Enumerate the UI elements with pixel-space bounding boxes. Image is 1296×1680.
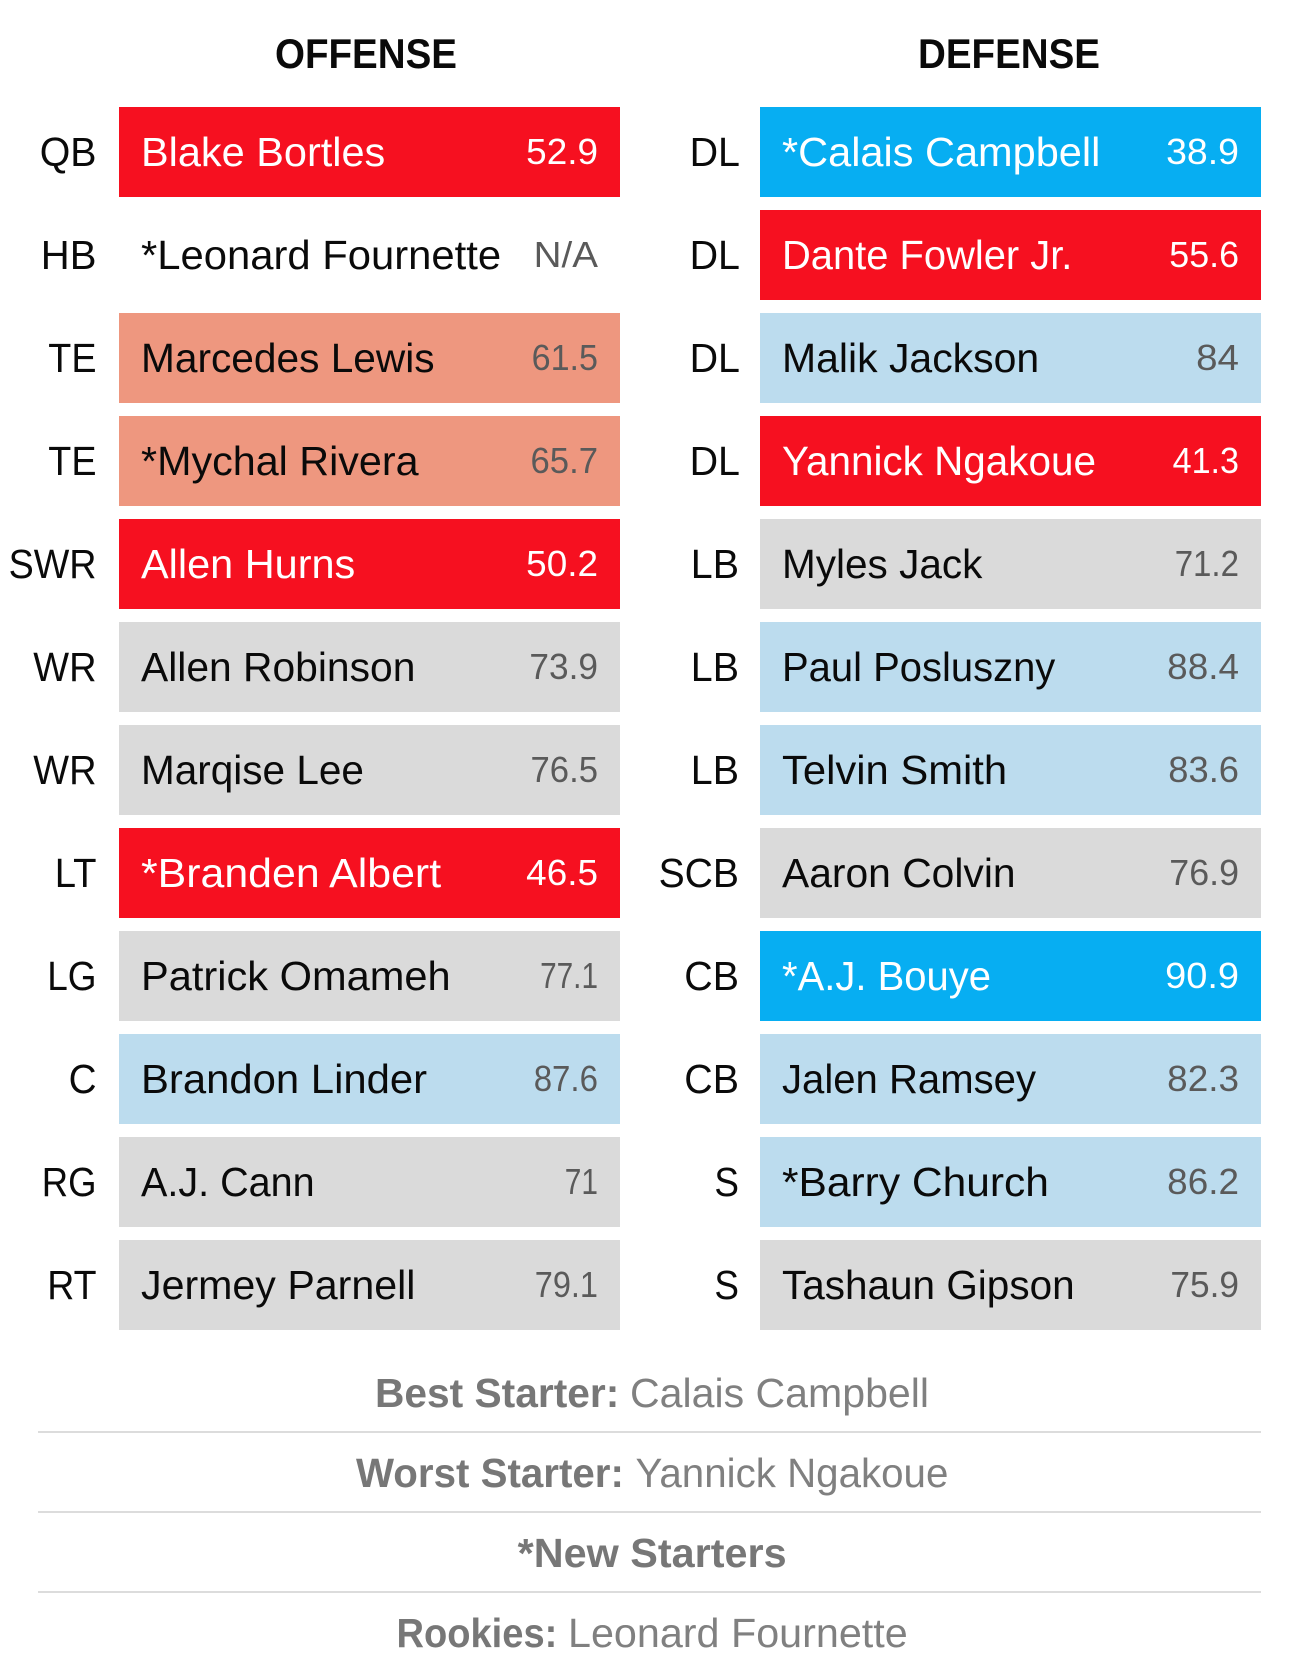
footer: rookies: Leonard Fournette xyxy=(568,1610,908,1656)
row: TE Mychal Rivera xyxy=(48,416,620,506)
row: LG Patrick Omameh: 77.1 xyxy=(540,955,598,996)
row: RG A.J. Cann: RG xyxy=(42,1159,96,1205)
row: DL Yannick Ngakoue: 41.3 xyxy=(1173,440,1239,481)
row: S Barry Church: S xyxy=(714,1159,739,1205)
row: WR Allen Robinson: 73.9 xyxy=(529,646,598,687)
row: S Tashaun Gipson xyxy=(714,1240,1261,1330)
footer: worst starter: Worst Starter: xyxy=(356,1450,624,1496)
footer: best starter xyxy=(375,1370,929,1416)
row: LB Myles Jack: LB xyxy=(691,541,739,587)
row: DL Yannick Ngakoue xyxy=(690,416,1261,506)
row: S Barry Church: 86.2 xyxy=(1167,1161,1239,1202)
row: WR Allen Robinson: Allen Robinson xyxy=(141,644,415,690)
row: CB Jalen Ramsey: CB xyxy=(684,1056,739,1102)
row: CB A.J. Bouye: 90.9 xyxy=(1165,955,1239,996)
row: QB Blake Bortles xyxy=(40,107,620,197)
footer: rookies xyxy=(396,1610,908,1656)
heading: offense: OFFENSE xyxy=(275,30,457,77)
footer: best starter: Best Starter: xyxy=(375,1370,619,1416)
row: SWR Allen Hurns xyxy=(9,519,620,609)
row: LT Branden Albert: 46.5 xyxy=(526,852,598,893)
row: CB Jalen Ramsey: Jalen Ramsey xyxy=(782,1056,1036,1102)
row: WR Allen Robinson: WR xyxy=(33,644,96,690)
row: DL Dante Fowler Jr.: 55.6 xyxy=(1169,234,1239,275)
row: LG Patrick Omameh: Patrick Omameh xyxy=(141,953,451,999)
row: DL Dante Fowler Jr.: DL xyxy=(690,232,740,278)
row: LT Branden Albert xyxy=(55,828,620,918)
row: TE Marcedes Lewis: 61.5 xyxy=(532,337,598,378)
row: LB Myles Jack: 71.2 xyxy=(1175,543,1239,584)
row: DL Dante Fowler Jr. xyxy=(690,210,1261,300)
row: CB Jalen Ramsey: 82.3 xyxy=(1167,1058,1239,1099)
row: LT Branden Albert: LT xyxy=(55,850,96,896)
row: C Brandon Linder: 87.6 xyxy=(534,1058,598,1099)
footer: best starter: Calais Campbell xyxy=(630,1370,929,1416)
panel: offense roster xyxy=(9,107,620,1330)
footer: new starters note: *New Starters xyxy=(518,1530,787,1576)
row: LB Telvin Smith: Telvin Smith xyxy=(782,747,1007,793)
row: TE Marcedes Lewis: TE xyxy=(48,335,96,381)
row: CB Jalen Ramsey xyxy=(684,1034,1261,1124)
row: HB Leonard Fournette: N/A xyxy=(534,234,598,275)
row: LB Myles Jack xyxy=(691,519,1261,609)
row: LB Paul Posluszny: Paul Posluszny xyxy=(782,644,1056,690)
row: C Brandon Linder xyxy=(69,1034,620,1124)
row: SWR Allen Hurns: Allen Hurns xyxy=(141,541,355,587)
row: RT Jermey Parnell xyxy=(47,1240,620,1330)
row: HB Leonard Fournette xyxy=(41,232,598,278)
row: DL Calais Campbell: 38.9 xyxy=(1166,131,1239,172)
row: DL Malik Jackson: Malik Jackson xyxy=(782,335,1039,381)
row: DL Malik Jackson xyxy=(690,313,1261,403)
row: DL Dante Fowler Jr.: Dante Fowler Jr. xyxy=(782,232,1072,278)
row: S Barry Church xyxy=(714,1137,1261,1227)
row: SCB Aaron Colvin xyxy=(659,828,1261,918)
row: DL Calais Campbell: DL xyxy=(690,129,740,175)
row: DL Calais Campbell xyxy=(690,107,1261,197)
row: RG A.J. Cann xyxy=(42,1137,620,1227)
row: S Tashaun Gipson: 75.9 xyxy=(1170,1264,1239,1305)
row: LB Telvin Smith: 83.6 xyxy=(1168,749,1239,790)
row: QB Blake Bortles: Blake Bortles xyxy=(141,129,385,175)
panel: defense roster xyxy=(659,107,1261,1330)
row: HB Leonard Fournette: *Leonard Fournette xyxy=(141,232,501,278)
row: SCB Aaron Colvin: SCB xyxy=(659,850,739,896)
footer: worst starter xyxy=(356,1450,948,1496)
row: WR Marqise Lee xyxy=(33,725,620,815)
footer: worst starter: Yannick Ngakoue xyxy=(636,1450,948,1496)
row: TE Mychal Rivera: *Mychal Rivera xyxy=(141,438,419,484)
row: RT Jermey Parnell: 79.1 xyxy=(535,1264,598,1305)
row: RT Jermey Parnell: Jermey Parnell xyxy=(141,1262,415,1308)
row: CB A.J. Bouye xyxy=(684,931,1261,1021)
row: QB Blake Bortles: 52.9 xyxy=(526,131,598,172)
row: WR Marqise Lee: 76.5 xyxy=(530,749,598,790)
row: S Barry Church: *Barry Church xyxy=(782,1159,1049,1205)
row: LT Branden Albert: *Branden Albert xyxy=(141,850,442,896)
row: WR Allen Robinson xyxy=(33,622,620,712)
row: QB Blake Bortles: QB xyxy=(40,129,96,175)
row: CB A.J. Bouye: CB xyxy=(684,953,739,999)
row: TE Marcedes Lewis xyxy=(48,313,620,403)
row: TE Marcedes Lewis: Marcedes Lewis xyxy=(141,335,435,381)
row: WR Marqise Lee: WR xyxy=(33,747,96,793)
row: SWR Allen Hurns: SWR xyxy=(9,541,97,587)
row: DL Yannick Ngakoue: DL xyxy=(690,438,740,484)
row: S Tashaun Gipson: S xyxy=(714,1262,739,1308)
row: LG Patrick Omameh xyxy=(47,931,620,1021)
row: LB Paul Posluszny: LB xyxy=(691,644,739,690)
row: C Brandon Linder: C xyxy=(69,1056,96,1102)
row: RG A.J. Cann: A.J. Cann xyxy=(141,1159,315,1205)
row: LB Paul Posluszny xyxy=(691,622,1261,712)
footer: rookies: Rookies: xyxy=(396,1610,557,1656)
row: LG Patrick Omameh: LG xyxy=(47,953,96,999)
row: CB A.J. Bouye: *A.J. Bouye xyxy=(782,953,991,999)
row: LB Telvin Smith: LB xyxy=(691,747,739,793)
row: SCB Aaron Colvin: Aaron Colvin xyxy=(782,850,1016,896)
row: DL Calais Campbell: *Calais Campbell xyxy=(782,129,1100,175)
row: C Brandon Linder: Brandon Linder xyxy=(141,1056,427,1102)
row: SCB Aaron Colvin: 76.9 xyxy=(1169,852,1239,893)
row: DL Malik Jackson: DL xyxy=(690,335,740,381)
row: DL Malik Jackson: 84 xyxy=(1196,337,1239,378)
row: TE Mychal Rivera: 65.7 xyxy=(530,440,598,481)
row: RG A.J. Cann: 71 xyxy=(565,1161,598,1202)
row: LB Paul Posluszny: 88.4 xyxy=(1167,646,1239,687)
row: LB Myles Jack: Myles Jack xyxy=(782,541,983,587)
row: S Tashaun Gipson: Tashaun Gipson xyxy=(782,1262,1075,1308)
row: TE Mychal Rivera: TE xyxy=(48,438,96,484)
row: WR Marqise Lee: Marqise Lee xyxy=(141,747,364,793)
heading: defense: DEFENSE xyxy=(918,30,1100,77)
row: HB Leonard Fournette: HB xyxy=(41,232,96,278)
row: DL Yannick Ngakoue: Yannick Ngakoue xyxy=(782,438,1096,484)
row: SWR Allen Hurns: 50.2 xyxy=(526,543,598,584)
row: LB Telvin Smith xyxy=(691,725,1261,815)
row: RT Jermey Parnell: RT xyxy=(47,1262,96,1308)
